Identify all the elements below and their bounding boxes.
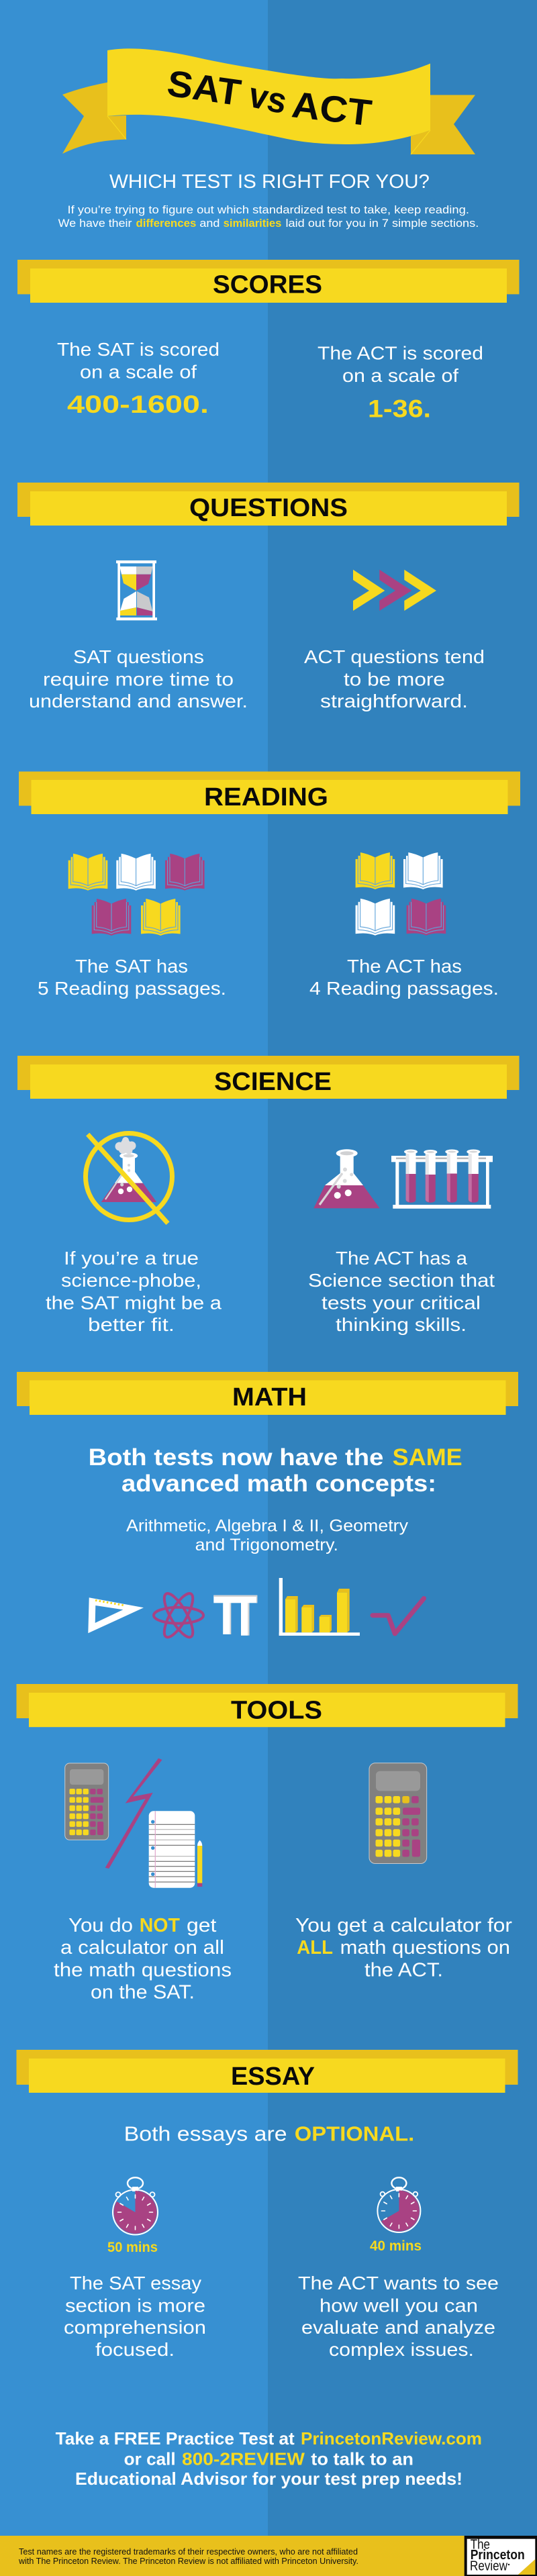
ACT science text: The ACT has a bbox=[336, 1248, 467, 1269]
background: SAT left column bbox=[0, 0, 268, 2576]
SAT tools text: a calculator on all bbox=[60, 1937, 224, 1959]
SAT tools text: You do bbox=[68, 1915, 133, 1936]
icon: five books bbox=[68, 854, 205, 936]
heading: questions: QUESTIONS bbox=[189, 494, 348, 522]
SAT score text: 400-1600. bbox=[67, 391, 209, 418]
essay lead text: Both essays are bbox=[124, 2122, 287, 2145]
ACT science text: tests your critical bbox=[322, 1293, 481, 1313]
heading: science: SCIENCE bbox=[214, 1068, 332, 1096]
call to action: or call bbox=[124, 2449, 176, 2469]
SAT essay text: The SAT essay bbox=[70, 2273, 201, 2293]
SAT score text bbox=[57, 339, 219, 418]
heading: tools bbox=[16, 1684, 518, 1727]
ACT science text bbox=[308, 1248, 495, 1335]
icon: small calculator bbox=[65, 1763, 109, 1840]
icon: lightning divider bbox=[105, 1758, 162, 1869]
SAT tools text: get bbox=[187, 1915, 216, 1936]
icon: four books bbox=[356, 852, 446, 936]
footer bbox=[0, 2536, 537, 2576]
SAT science text: If you’re a true bbox=[64, 1248, 199, 1269]
ACT score text: on a scale of bbox=[342, 365, 458, 386]
heading: questions bbox=[17, 483, 520, 526]
ACT questions text: ACT questions tend bbox=[304, 646, 485, 667]
icon: notebook paper bbox=[149, 1811, 195, 1888]
SAT tools text: NOT bbox=[140, 1915, 180, 1936]
heading: math bbox=[17, 1372, 518, 1415]
logo: The Princeton Review bbox=[465, 2536, 537, 2576]
ACT tools text bbox=[295, 1915, 512, 1981]
icon: large calculator bbox=[369, 1763, 427, 1863]
icon: bar chart bbox=[279, 1578, 360, 1636]
call to action: Take a FREE Practice Test at bbox=[56, 2428, 295, 2448]
ACT essay text bbox=[298, 2273, 499, 2360]
disclaimer text: with The Princeton Review. The Princeton Review is not affiliated with Princeton University. bbox=[18, 2557, 358, 2566]
call to action: 800-2REVIEW bbox=[182, 2449, 305, 2469]
heading: scores: SCORES bbox=[213, 271, 322, 299]
SAT questions text: SAT questions bbox=[73, 646, 204, 667]
ACT score text: The ACT is scored bbox=[318, 343, 483, 364]
panel: science bbox=[17, 1056, 520, 1335]
ACT score text bbox=[318, 343, 483, 422]
SAT reading text: 5 Reading passages. bbox=[38, 978, 226, 999]
intro text: We have their bbox=[58, 217, 132, 230]
subtitle: WHICH TEST IS RIGHT FOR YOU? bbox=[109, 171, 430, 193]
intro text bbox=[58, 203, 479, 230]
SAT science text: science-phobe, bbox=[61, 1270, 201, 1291]
math lead text: Both tests now have the bbox=[89, 1444, 383, 1471]
intro text: and bbox=[199, 217, 219, 230]
ACT questions text: straightforward. bbox=[320, 691, 468, 711]
icon: test tube rack bbox=[391, 1149, 493, 1209]
heading: essay: ESSAY bbox=[231, 2063, 315, 2091]
title banner bbox=[62, 48, 475, 154]
logo: The Princeton Review: The bbox=[471, 2537, 490, 2552]
SAT essay text: section is more bbox=[65, 2295, 205, 2316]
icon: atom bbox=[154, 1590, 203, 1641]
ACT score text: 1-36. bbox=[368, 395, 431, 422]
ACT essay text: how well you can bbox=[320, 2295, 478, 2316]
icon: 50 minute stopwatch bbox=[113, 2177, 158, 2235]
SAT essay text: comprehension bbox=[64, 2317, 206, 2338]
title text: vs bbox=[246, 75, 291, 121]
panel: questions bbox=[17, 483, 520, 711]
heading: reading bbox=[19, 772, 520, 814]
intro text: differences bbox=[136, 217, 196, 230]
SAT tools text: the math questions bbox=[54, 1960, 232, 1981]
SAT questions text: understand and answer. bbox=[29, 691, 248, 711]
background: ACT right column bbox=[268, 0, 537, 2576]
math lead text: advanced math concepts: bbox=[121, 1471, 436, 1497]
ACT questions text bbox=[304, 646, 485, 711]
heading: reading: READING bbox=[204, 783, 328, 811]
icon: set square bbox=[88, 1597, 144, 1633]
ACT science text: Science section that bbox=[308, 1270, 495, 1291]
panel: reading bbox=[19, 772, 520, 999]
disclaimer text bbox=[18, 2547, 358, 2566]
math lead text bbox=[89, 1444, 462, 1497]
title text bbox=[164, 62, 374, 134]
panel: tools bbox=[16, 1684, 518, 2003]
intro text: If you’re trying to figure out which standardized test to take, keep reading. bbox=[67, 203, 469, 216]
logo: The Princeton Review: Review bbox=[470, 2559, 507, 2573]
label: 40 mins: 40 mins bbox=[370, 2238, 422, 2254]
ACT science text: thinking skills. bbox=[336, 1314, 467, 1335]
SAT essay text bbox=[64, 2273, 206, 2360]
SAT score text: The SAT is scored bbox=[57, 339, 219, 360]
panel: essay bbox=[16, 2050, 518, 2360]
call to action bbox=[56, 2428, 482, 2489]
ACT essay text: complex issues. bbox=[329, 2339, 474, 2360]
icon: pi symbol bbox=[213, 1595, 257, 1636]
ACT essay text: evaluate and analyze bbox=[301, 2317, 495, 2338]
title text: ACT bbox=[290, 83, 374, 134]
SAT science text: the SAT might be a bbox=[46, 1293, 222, 1313]
icon: 40 minute stopwatch bbox=[377, 2177, 420, 2232]
SAT questions text: require more time to bbox=[43, 668, 234, 690]
disclaimer text: Test names are the registered trademarks of their respective owners, who are not affiliated bbox=[19, 2547, 358, 2557]
panel: math bbox=[17, 1372, 518, 1641]
ACT reading text: 4 Reading passages. bbox=[309, 978, 499, 999]
icon: chevrons bbox=[353, 570, 436, 611]
ACT questions text: to be more bbox=[344, 668, 445, 690]
essay lead text bbox=[124, 2122, 414, 2145]
SAT tools text bbox=[54, 1915, 232, 2003]
SAT science text: better fit. bbox=[88, 1314, 175, 1335]
heading: science bbox=[17, 1056, 520, 1099]
panel: scores bbox=[17, 260, 520, 422]
ACT tools text: the ACT. bbox=[364, 1960, 443, 1981]
intro text: laid out for you in 7 simple sections. bbox=[286, 217, 479, 230]
icon: pencil bbox=[197, 1840, 202, 1887]
heading: essay bbox=[16, 2050, 518, 2093]
SAT score text: on a scale of bbox=[80, 361, 197, 382]
icon: crossed-out flask bbox=[86, 1133, 172, 1224]
SAT reading text: The SAT has bbox=[75, 956, 188, 977]
call to action: to talk to an bbox=[311, 2449, 413, 2469]
heading: tools: TOOLS bbox=[231, 1697, 322, 1725]
ACT tools text: You get a calculator for bbox=[295, 1915, 512, 1936]
call to action: PrincetonReview.com bbox=[301, 2428, 482, 2448]
ACT tools text: ALL bbox=[297, 1937, 333, 1959]
SAT essay text: focused. bbox=[95, 2339, 175, 2360]
logo: The Princeton Review: Princeton bbox=[471, 2548, 525, 2563]
heading: math: MATH bbox=[232, 1383, 307, 1411]
icon: hourglass bbox=[116, 560, 157, 620]
heading: scores bbox=[17, 260, 520, 303]
math lead text: SAME bbox=[393, 1444, 462, 1471]
math topics text: and Trigonometry. bbox=[195, 1536, 338, 1554]
math topics text bbox=[126, 1517, 409, 1554]
icon: flask bbox=[313, 1149, 380, 1208]
math topics text: Arithmetic, Algebra I & II, Geometry bbox=[126, 1517, 409, 1536]
ACT tools text: math questions on bbox=[340, 1937, 510, 1959]
label: 50 mins: 50 mins bbox=[107, 2240, 158, 2255]
ACT essay text: The ACT wants to see bbox=[298, 2273, 499, 2293]
ACT reading text bbox=[309, 956, 499, 999]
title text: SAT bbox=[164, 62, 244, 113]
SAT reading text bbox=[38, 956, 226, 999]
SAT questions text bbox=[29, 646, 248, 711]
call to action: Educational Advisor for your test prep needs! bbox=[75, 2469, 462, 2489]
ACT reading text: The ACT has bbox=[347, 956, 462, 977]
SAT science text bbox=[46, 1248, 222, 1335]
essay lead text: OPTIONAL. bbox=[295, 2122, 414, 2145]
intro text: similarities bbox=[224, 217, 281, 230]
icon: check mark bbox=[373, 1599, 424, 1634]
SAT tools text: on the SAT. bbox=[91, 1981, 195, 2003]
